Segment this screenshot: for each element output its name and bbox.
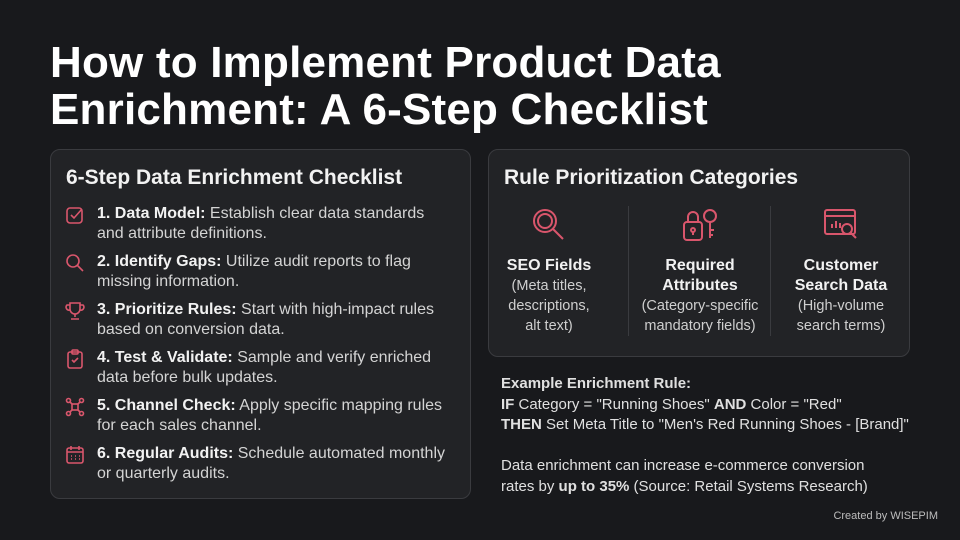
heading: checklist: 6-Step Data Enrichment Checklist	[66, 166, 402, 189]
panel: rule categories	[488, 149, 910, 357]
column: required attributes: (Category-specific mandatory fields)	[642, 298, 758, 334]
title: How to Implement Product Data	[50, 38, 721, 87]
example rule text: Data enrichment can increase e-commerce conversion	[501, 457, 864, 474]
heading: categories: Rule Prioritization Categories	[504, 166, 798, 189]
example rule text: Example Enrichment Rule:	[501, 375, 691, 392]
column: required attributes	[642, 209, 758, 334]
column: SEO fields	[507, 209, 591, 334]
item 1: 1. Data Model: Establish clear data standards and attribute definitions.	[97, 205, 424, 242]
column: customer search: Customer	[804, 257, 878, 274]
column: customer search: (High-volume search terms)	[797, 298, 885, 334]
column: customer search	[795, 209, 888, 334]
column: customer search: Search Data	[795, 277, 887, 294]
divider	[628, 206, 629, 336]
column: required attributes: Required Attributes	[662, 257, 738, 294]
item 3: 3. Prioritize Rules: Start with high-impact rules based on conversion data.	[97, 301, 434, 338]
divider	[770, 206, 771, 336]
example rule text: IF Category = "Running Shoes" AND Color = "Red"	[501, 396, 842, 412]
example rule text: THEN Set Meta Title to "Men's Red Running Shoes - [Brand]"	[501, 416, 909, 433]
panel: checklist	[50, 149, 471, 499]
credit: Created by WISEPIM	[833, 510, 938, 522]
example rule text	[501, 375, 909, 494]
item 6: 6. Regular Audits: Schedule automated monthly or quarterly audits.	[97, 445, 445, 482]
example rule text: rates by up to 35% (Source: Retail Systems Research)	[501, 478, 868, 494]
item 5: 5. Channel Check: Apply specific mapping rules for each sales channel.	[97, 397, 442, 434]
column: SEO fields: (Meta titles, descriptions, alt text)	[508, 278, 590, 334]
item 4: 4. Test & Validate: Sample and verify enriched data before bulk updates.	[97, 349, 431, 386]
title	[50, 38, 721, 134]
column: SEO fields: SEO Fields	[507, 257, 591, 274]
title: Enrichment: A 6-Step Checklist	[50, 85, 708, 134]
item 2: 2. Identify Gaps: Utilize audit reports to flag missing information.	[97, 253, 411, 290]
